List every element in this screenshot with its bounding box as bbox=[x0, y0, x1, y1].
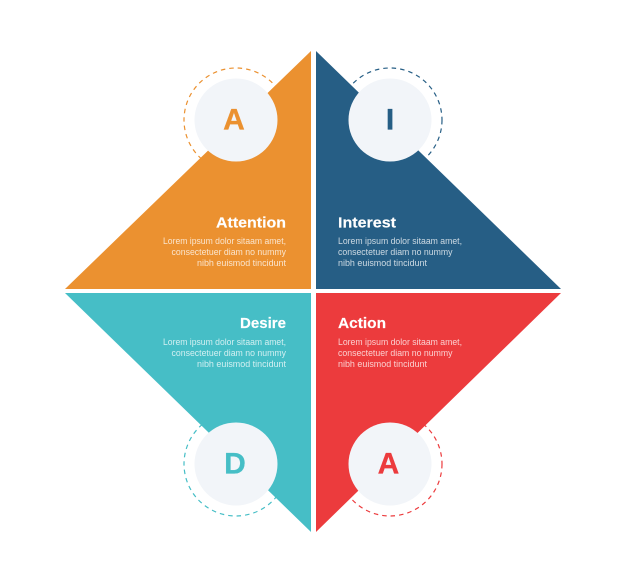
text block: action: Lorem ipsum dolor sitaam amet, bbox=[338, 337, 462, 348]
heading: Desire: Desire bbox=[240, 316, 286, 332]
icon: letter D badge: D bbox=[224, 448, 246, 480]
icon: letter D badge bbox=[194, 422, 278, 506]
text block: attention bbox=[163, 236, 286, 269]
text block: desire: consectetuer diam no nummy bbox=[172, 348, 286, 359]
text block: desire: nibh euismod tincidunt bbox=[197, 359, 286, 370]
icon: letter A badge: A bbox=[223, 104, 245, 136]
dashed ring: interest bbox=[338, 68, 442, 172]
icon: letter A badge: A bbox=[378, 448, 399, 480]
panel: attention bbox=[65, 51, 311, 289]
text block: interest: nibh euismod tincidunt bbox=[338, 258, 427, 269]
text block: interest bbox=[338, 236, 462, 269]
icon: letter I badge bbox=[348, 78, 432, 162]
text block: desire bbox=[163, 337, 286, 370]
text block: desire: Lorem ipsum dolor sitaam amet, bbox=[163, 337, 286, 348]
panel: action bbox=[316, 293, 561, 532]
icon: letter A badge bbox=[194, 78, 278, 162]
dashed ring: action bbox=[338, 412, 442, 516]
text block: interest: consectetuer diam no nummy bbox=[338, 247, 453, 258]
red triangle bbox=[316, 293, 561, 532]
icon: letter A badge bbox=[348, 422, 432, 506]
panel: interest bbox=[316, 51, 561, 289]
heading: Interest: Interest bbox=[338, 216, 396, 232]
text block: attention: nibh euismod tincidunt bbox=[197, 258, 286, 269]
heading: Action: Action bbox=[338, 316, 386, 332]
blue triangle bbox=[316, 51, 561, 289]
text block: interest: Lorem ipsum dolor sitaam amet, bbox=[338, 236, 462, 247]
text block: action: consectetuer diam no nummy bbox=[338, 348, 453, 359]
teal triangle bbox=[65, 293, 311, 532]
dashed ring: desire bbox=[184, 412, 288, 516]
text block: action bbox=[338, 337, 462, 370]
text block: attention: consectetuer diam no nummy bbox=[172, 247, 286, 258]
heading: Attention: Attention bbox=[216, 216, 286, 232]
dashed ring: attention bbox=[184, 68, 288, 172]
panel: desire bbox=[65, 293, 311, 532]
text block: attention: Lorem ipsum dolor sitaam amet, bbox=[163, 236, 286, 247]
text block: action: nibh euismod tincidunt bbox=[338, 359, 427, 370]
orange triangle bbox=[65, 51, 311, 289]
icon: letter I badge: I bbox=[386, 104, 394, 136]
